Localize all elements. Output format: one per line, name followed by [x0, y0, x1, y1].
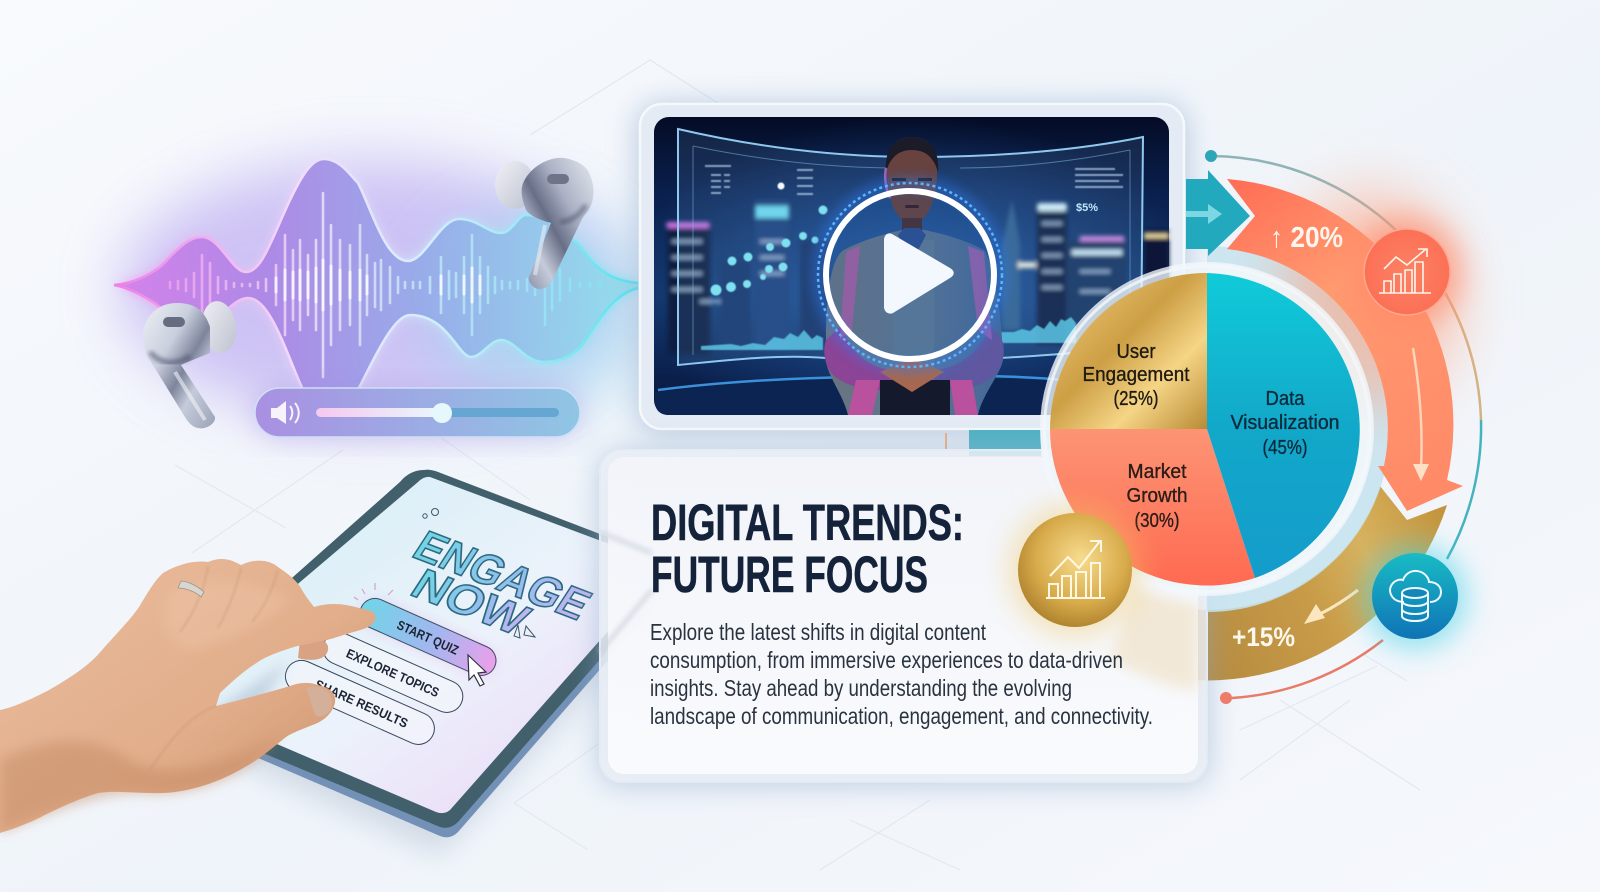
teal orbit arc behind card [1002, 457, 1039, 540]
curved HUD panel [678, 129, 1143, 365]
label: data visualization: (45%) [1262, 437, 1308, 459]
label: market growth [1126, 461, 1188, 532]
label: data visualization: Data [1266, 388, 1305, 410]
video player frame [636, 103, 1188, 435]
button: share results [280, 655, 440, 750]
title: FUTURE FOCUS [651, 546, 928, 603]
button: start quiz: START QUIZ [395, 617, 461, 658]
pale band around pie [1207, 255, 1381, 603]
label: data visualization [1230, 388, 1340, 459]
teal entry arrow [1186, 170, 1250, 256]
description: landscape of communication, engagement, and connectivity. [650, 703, 1153, 729]
HUD bar charts [701, 317, 1076, 350]
slice: market growth [1050, 429, 1255, 586]
video scene: $5% [1076, 202, 1098, 214]
waveform frequency bars [170, 193, 600, 377]
label: market growth: (30%) [1134, 510, 1180, 532]
curled finger [298, 638, 328, 660]
slice: data visualization [1207, 273, 1360, 578]
description: Explore the latest shifts in digital content [650, 619, 986, 645]
label: user engagement: Engagement [1082, 364, 1190, 386]
play button ring [818, 183, 1002, 367]
icon: play triangle [884, 233, 954, 314]
text card [598, 450, 1210, 786]
icon: speaker [271, 401, 299, 424]
earbud: left [143, 299, 239, 428]
wedding ring [178, 581, 204, 597]
label: market growth: Market [1128, 461, 1187, 483]
icon: coral chart badge [1352, 217, 1462, 327]
skyline [666, 200, 1169, 354]
audio waveform [114, 159, 650, 420]
title: DIGITAL TRENDS: [651, 494, 964, 551]
gold band segment [1120, 486, 1447, 680]
pie chart [1043, 265, 1371, 593]
icon: gold chart coin [1009, 504, 1141, 636]
label: user engagement [1082, 341, 1190, 410]
trend arrow band: coral [1227, 179, 1463, 511]
label: plus 15%: +15% [1232, 622, 1295, 652]
icon: cloud database badge [1363, 545, 1467, 649]
label: user engagement: User [1116, 341, 1156, 363]
label: data visualization: Visualization [1230, 412, 1340, 434]
tablet ghost through glass [600, 532, 652, 652]
warm tint through glass [1110, 590, 1198, 690]
presenter [824, 137, 1004, 415]
description [650, 619, 1153, 729]
description: insights. Stay ahead by understanding the evolving [650, 675, 1072, 701]
button: share results: SHARE RESULTS [313, 676, 411, 731]
tablet [156, 470, 700, 855]
button: explore topics [318, 627, 468, 718]
title [651, 494, 964, 603]
slice: user engagement [1050, 273, 1207, 429]
description: consumption, from immersive experiences to data-driven [650, 647, 1123, 673]
label: user engagement: (25%) [1114, 388, 1158, 410]
tablet heading [354, 508, 600, 644]
tablet heading: NOW [402, 561, 538, 644]
tablet heading: ENGAGE [404, 523, 600, 629]
hand [0, 559, 376, 833]
button: start quiz [355, 594, 501, 680]
floor [655, 377, 858, 415]
arrow: down [1413, 348, 1429, 481]
presenter hands [880, 358, 944, 392]
teal bridge blocks [945, 430, 1041, 456]
arrow: gold band [1304, 590, 1358, 624]
label: up 20%: ↑ 20% [1270, 222, 1343, 254]
fingernail [306, 687, 332, 716]
volume slider [255, 388, 580, 437]
video scene [654, 117, 1169, 415]
label: market growth: Growth [1126, 485, 1188, 507]
orbit lines [1205, 150, 1481, 704]
earbud: right [495, 158, 594, 289]
button: explore topics: EXPLORE TOPICS [344, 646, 442, 700]
icon: cursor [468, 655, 486, 686]
HUD text and data points [705, 165, 1123, 195]
